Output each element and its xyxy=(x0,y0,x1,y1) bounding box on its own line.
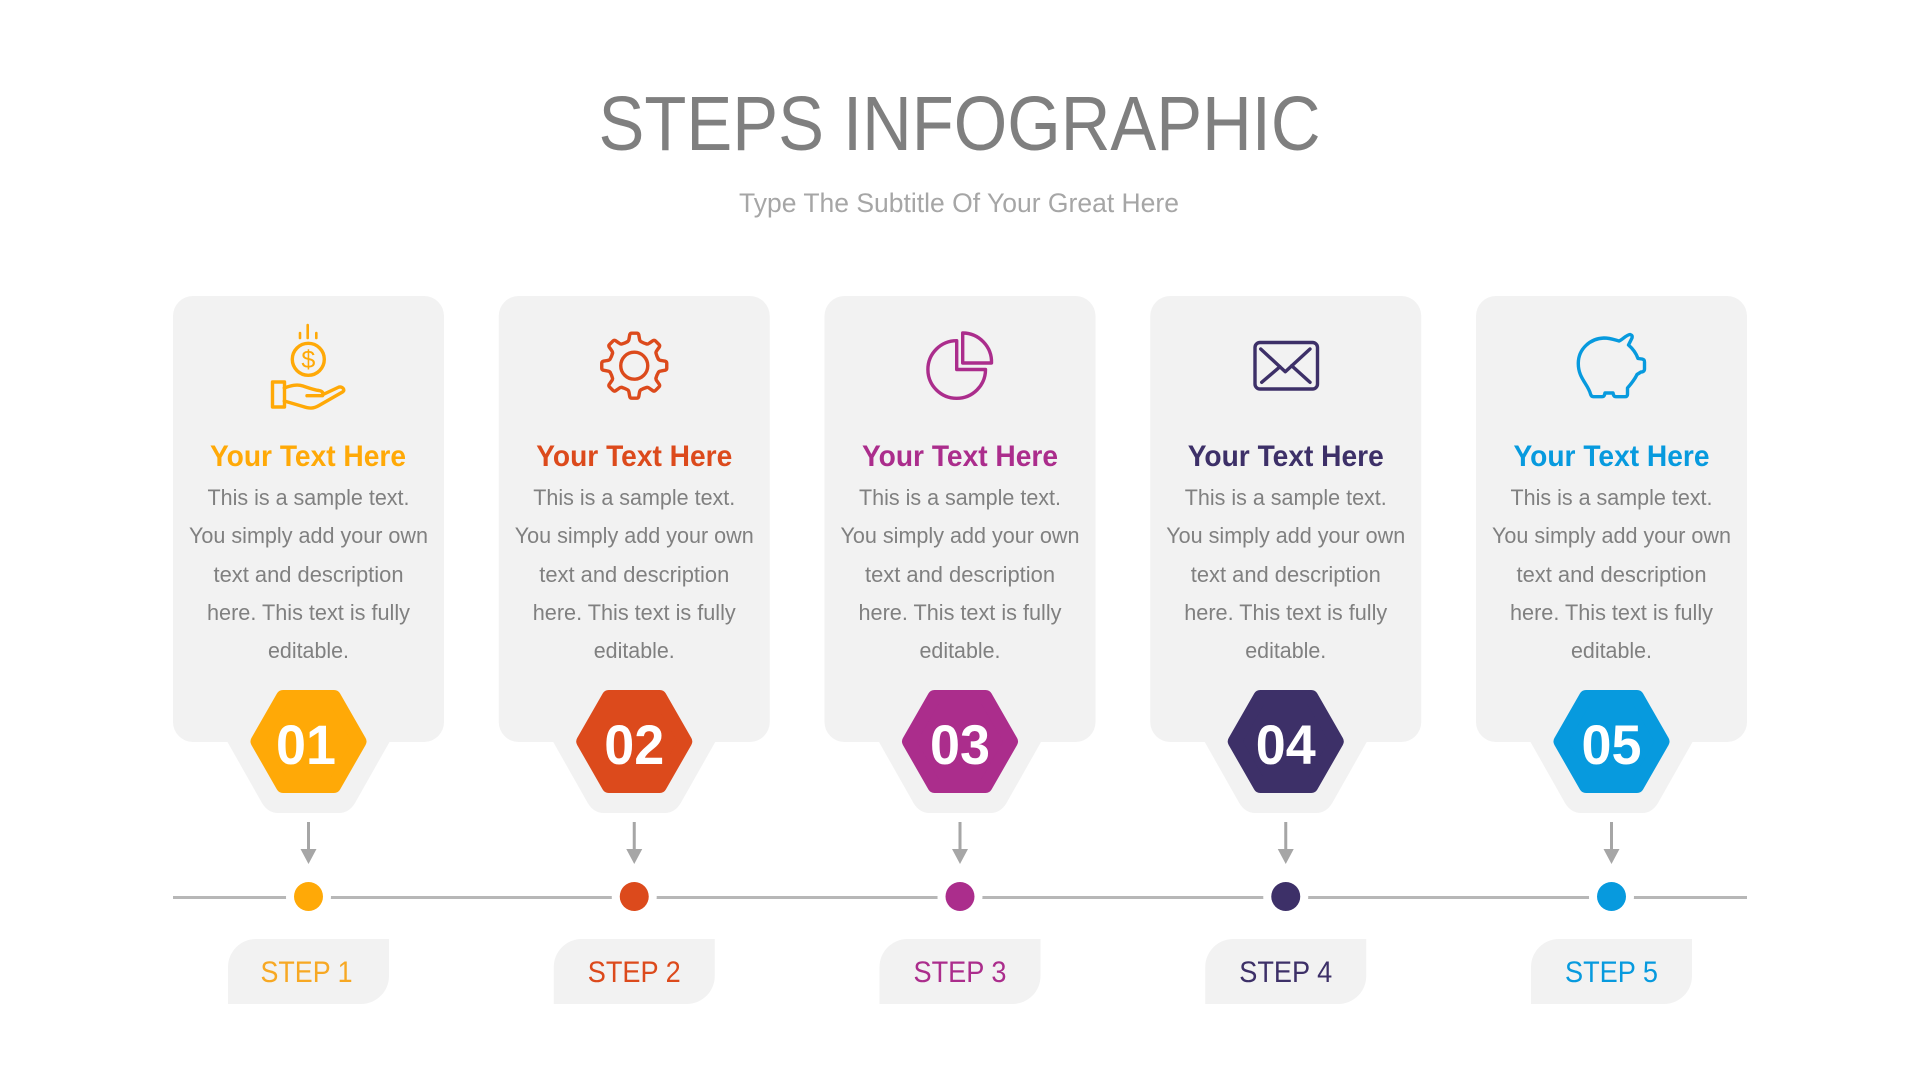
title: STEPS INFOGRAPHIC xyxy=(598,81,1320,167)
step label: STEP 3 xyxy=(914,956,1006,989)
description: This is a sample text. xyxy=(208,485,410,510)
arrow xyxy=(626,822,642,864)
panel: step 3 xyxy=(824,296,1096,1004)
arrow xyxy=(952,822,968,864)
step label xyxy=(1205,939,1366,1004)
description: editable. xyxy=(1571,638,1652,663)
description: text and description xyxy=(1191,562,1381,587)
step label: STEP 5 xyxy=(1565,956,1658,989)
panel: step 1 xyxy=(173,296,444,1004)
description: editable. xyxy=(1245,638,1326,663)
heading: Your Text Here xyxy=(1514,440,1710,473)
description: here. This text is fully xyxy=(858,600,1062,625)
heading: Your Text Here xyxy=(1188,440,1384,473)
icon: hand with coin xyxy=(272,325,344,408)
timeline marker xyxy=(1589,874,1634,920)
card background xyxy=(1476,296,1747,813)
number hexagon xyxy=(1235,697,1337,786)
number hexagon: 05 xyxy=(1582,713,1642,776)
card background xyxy=(499,296,770,813)
description: You simply add your own xyxy=(515,523,754,548)
number hexagon xyxy=(258,697,360,786)
step label xyxy=(880,939,1040,1004)
icon: gear xyxy=(602,333,667,398)
description: text and description xyxy=(214,562,404,587)
description: This is a sample text. xyxy=(533,485,735,510)
description: here. This text is fully xyxy=(207,600,410,625)
step label: STEP 2 xyxy=(588,956,681,989)
description: This is a sample text. xyxy=(1185,485,1387,510)
description: You simply add your own xyxy=(840,523,1080,548)
timeline marker xyxy=(612,874,657,920)
number hexagon: 03 xyxy=(930,713,990,776)
description: text and description xyxy=(539,562,729,587)
step label: STEP 1 xyxy=(260,956,352,989)
number hexagon: 02 xyxy=(604,713,664,776)
heading: Your Text Here xyxy=(536,440,732,473)
number hexagon xyxy=(909,697,1011,786)
number hexagon xyxy=(1560,697,1662,786)
subtitle: Type The Subtitle Of Your Great Here xyxy=(739,188,1179,218)
icon: pie chart xyxy=(928,333,992,398)
arrow xyxy=(1604,822,1620,864)
arrow xyxy=(1278,822,1294,864)
description: here. This text is fully xyxy=(533,600,736,625)
icon: envelope xyxy=(1255,342,1318,389)
description: text and description xyxy=(865,562,1055,587)
card background xyxy=(173,296,444,813)
description xyxy=(840,485,1080,663)
heading: Your Text Here xyxy=(210,440,406,473)
card background xyxy=(1150,296,1421,813)
timeline marker xyxy=(1263,874,1308,920)
step label: STEP 4 xyxy=(1239,956,1332,989)
timeline line xyxy=(173,896,1747,899)
panel: step 2 xyxy=(499,296,770,1004)
description: editable. xyxy=(268,638,349,663)
description: editable. xyxy=(594,638,675,663)
timeline marker xyxy=(938,874,982,920)
description: This is a sample text. xyxy=(859,485,1061,510)
description: here. This text is fully xyxy=(1510,600,1713,625)
description: text and description xyxy=(1516,562,1706,587)
step label xyxy=(1531,939,1692,1004)
description xyxy=(1166,485,1405,663)
icon: hand with coin: $ xyxy=(301,346,315,374)
description xyxy=(1492,485,1731,663)
description xyxy=(515,485,754,663)
heading: Your Text Here xyxy=(862,440,1058,473)
icon: piggy bank xyxy=(1578,334,1644,397)
description: You simply add your own xyxy=(1166,523,1405,548)
number hexagon: 01 xyxy=(276,713,336,776)
description: here. This text is fully xyxy=(1184,600,1387,625)
step label xyxy=(228,939,389,1004)
number hexagon: 04 xyxy=(1256,713,1316,776)
panel: step 5 xyxy=(1476,296,1747,1004)
description: You simply add your own xyxy=(189,523,428,548)
arrow xyxy=(300,822,316,864)
timeline marker xyxy=(286,874,331,920)
card background xyxy=(824,296,1096,813)
panel: step 4 xyxy=(1150,296,1421,1004)
number hexagon xyxy=(583,697,685,786)
description: You simply add your own xyxy=(1492,523,1731,548)
description: editable. xyxy=(920,638,1000,663)
description xyxy=(189,485,428,663)
description: This is a sample text. xyxy=(1510,485,1712,510)
step label xyxy=(554,939,715,1004)
